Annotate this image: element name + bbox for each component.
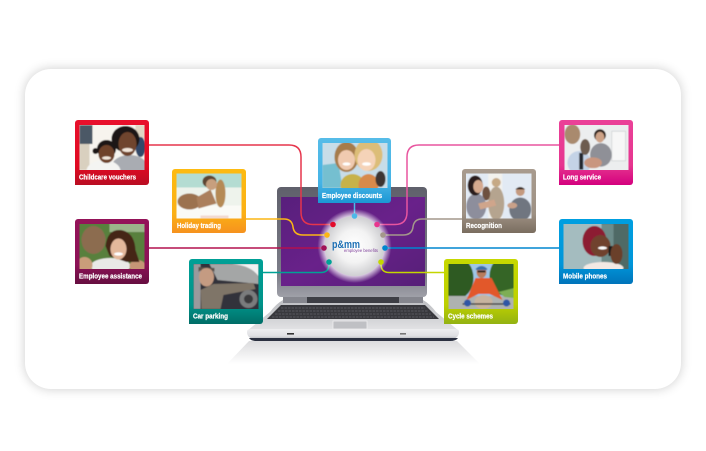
label: mobile phones: Mobile phones bbox=[563, 274, 607, 280]
laptop hinge bbox=[283, 296, 423, 303]
label: cycle schemes: Cycle schemes bbox=[448, 314, 493, 320]
line: long service bbox=[377, 145, 559, 224]
card: employee assistance bbox=[75, 219, 149, 284]
card: recognition bbox=[462, 169, 536, 233]
connector dots bbox=[321, 213, 388, 265]
line: car parking bbox=[263, 262, 329, 272]
panel: rounded white background bbox=[25, 69, 681, 389]
photo: couple embracing bbox=[80, 224, 144, 269]
line: mobile phones bbox=[385, 247, 559, 249]
laptop bbox=[247, 187, 459, 341]
laptop front edge bbox=[247, 329, 459, 341]
central logo disc bbox=[318, 209, 392, 283]
label: long service: Long service bbox=[563, 174, 601, 182]
photo: business handshake bbox=[564, 125, 628, 170]
card: holiday trading bbox=[172, 169, 246, 233]
photo: two girls shopping bbox=[322, 143, 388, 188]
label: car parking: Car parking bbox=[193, 314, 228, 320]
laptop lid bbox=[277, 187, 427, 297]
label: holiday trading: Holiday trading bbox=[177, 223, 221, 230]
logo: employee benefits: employee benefits bbox=[344, 248, 379, 253]
card: employee discounts bbox=[318, 138, 391, 203]
card: mobile phones bbox=[559, 219, 633, 284]
photo: two children bbox=[80, 125, 144, 170]
photo: cyclist bbox=[448, 264, 514, 309]
line: cycle schemes bbox=[381, 262, 444, 272]
label: childcare vouchers: Childcare vouchers bbox=[79, 174, 136, 182]
photo: woman on phone bbox=[564, 224, 628, 269]
card: cycle schemes bbox=[440, 256, 524, 324]
logo: p&mm: p&mm bbox=[332, 239, 360, 251]
label: employee discounts: Employee discounts bbox=[322, 193, 382, 200]
laptop screen bbox=[281, 197, 425, 286]
line: holiday trading bbox=[246, 219, 327, 235]
line: recognition bbox=[383, 219, 462, 235]
line: employee assistance bbox=[149, 247, 324, 249]
laptop touchpad bbox=[333, 321, 367, 329]
card: car parking bbox=[189, 259, 263, 324]
line: childcare vouchers bbox=[149, 145, 333, 224]
photo: woman on beach bbox=[176, 174, 242, 218]
card: long service bbox=[559, 120, 633, 185]
label: employee assistance: Employee assistance bbox=[79, 274, 142, 280]
laptop shadow on floor bbox=[227, 341, 480, 364]
photo: people applauding bbox=[466, 174, 532, 218]
laptop base bbox=[247, 300, 459, 331]
connector lines bbox=[149, 145, 559, 272]
label: recognition: Recognition bbox=[466, 223, 502, 230]
photo: man driving bbox=[194, 264, 258, 309]
card: childcare vouchers bbox=[75, 120, 149, 185]
line: employee discounts bbox=[354, 203, 356, 216]
laptop keyboard bbox=[267, 305, 439, 319]
